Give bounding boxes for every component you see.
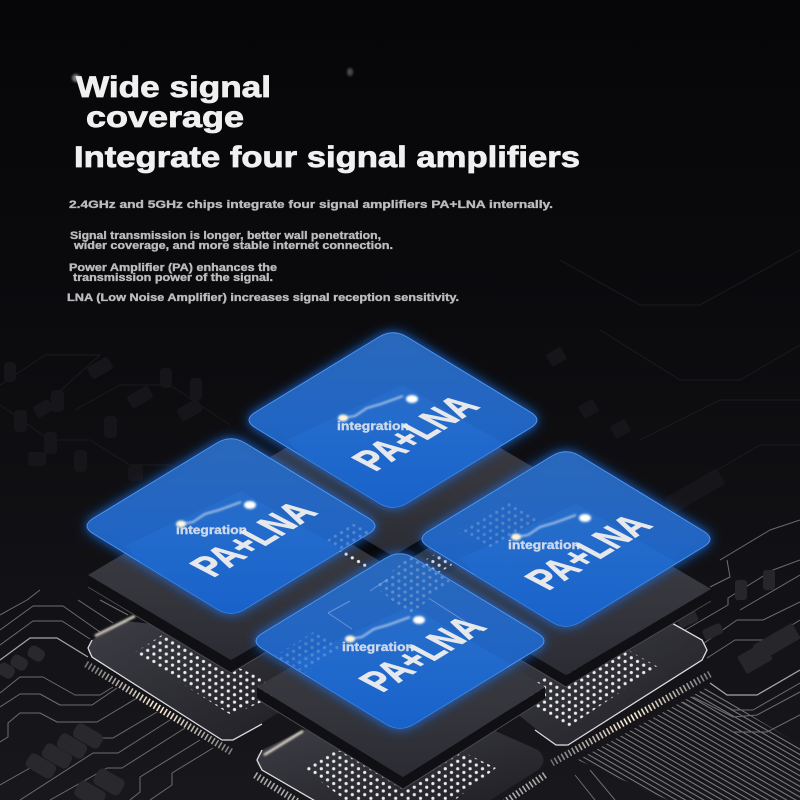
text: signal transmission — [70, 230, 393, 252]
substrate front — [256, 730, 544, 800]
label: PA+LNA: PA+LNA — [341, 389, 489, 476]
chip: front — [255, 602, 545, 800]
chip: right — [421, 504, 711, 763]
text: low noise amplifier: LNA (Low Noise Amplifier) increases signal reception sensitivity. — [67, 292, 459, 304]
text: power amplifier: Power Amplifier (PA) enhances the — [69, 262, 277, 274]
pins left — [86, 664, 233, 753]
text: signal transmission: wider coverage, and more stable internet connection. — [73, 240, 393, 252]
substrate edge left — [88, 640, 262, 740]
faint circuit background — [0, 250, 800, 495]
title — [76, 71, 271, 134]
highlight left — [95, 616, 135, 636]
text: chips description: 2.4GHz and 5GHz chips integrate four signal amplifiers PA+LNA internally. — [69, 199, 553, 211]
pins right — [552, 674, 710, 763]
title: coverage — [86, 101, 244, 134]
blue panel: right — [422, 452, 710, 639]
capacitors, bottom left — [0, 644, 126, 800]
chip: left — [86, 490, 376, 753]
small dark components, upper left — [4, 346, 725, 514]
pins front — [255, 775, 298, 800]
blue panel: left — [87, 439, 375, 626]
substrate edge right — [535, 622, 707, 745]
dot array front — [303, 750, 496, 800]
text: signal transmission: Signal transmission is longer, better wall penetration, — [70, 230, 381, 242]
capacitors, bottom right — [676, 570, 800, 674]
label: PA+LNA: PA+LNA — [348, 610, 496, 697]
substrate left — [88, 621, 300, 742]
dot array left — [134, 635, 290, 715]
label: integration: integration — [508, 538, 580, 552]
label: integration: integration — [176, 523, 247, 537]
label: integration: integration — [342, 640, 414, 654]
label: PA+LNA: PA+LNA — [179, 495, 327, 582]
text: power amplifier — [69, 262, 277, 284]
sparkle decorations — [72, 68, 353, 82]
chip: back — [248, 385, 538, 640]
highlight front — [264, 731, 303, 755]
circuit traces, bottom left — [0, 590, 213, 800]
text: power amplifier: transmission power of the signal. — [73, 272, 273, 284]
title: Wide signal — [76, 71, 271, 104]
blue panel: front — [256, 554, 544, 741]
label: integration: integration — [337, 419, 409, 433]
substrate edge front — [257, 750, 317, 800]
circuit traces, bottom right — [575, 520, 800, 800]
blue panel: back — [249, 333, 537, 520]
label: PA+LNA: PA+LNA — [514, 508, 662, 595]
subtitle: Integrate four signal amplifiers — [74, 141, 580, 174]
dot array right — [510, 650, 658, 728]
substrate right — [500, 622, 707, 746]
